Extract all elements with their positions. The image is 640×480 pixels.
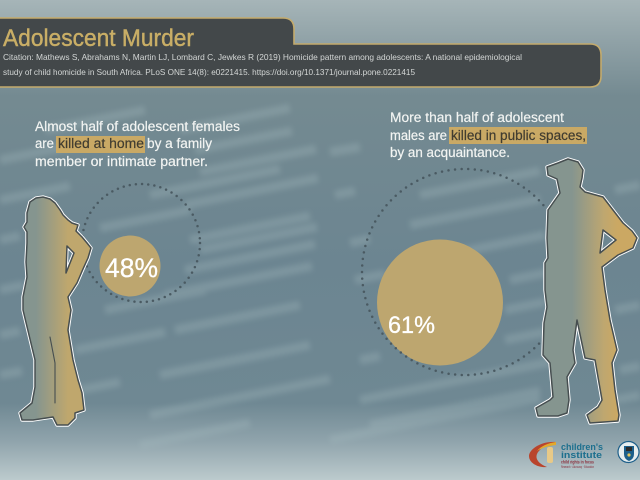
female statement text: by a family <box>147 136 212 151</box>
female statement text <box>35 119 240 169</box>
panel: female statistic <box>20 119 240 425</box>
citation: study of child homicide in South Africa. PLoS ONE 14(8): e0221415. https://doi.org/10.1371/journal.pone.0221415 <box>3 67 415 77</box>
female percentage: 48% <box>105 253 158 283</box>
female solid circle <box>100 236 160 296</box>
logo: university crest <box>618 442 639 462</box>
icon: logo arc <box>529 442 556 467</box>
male statement text: by an acquaintance. <box>390 145 510 160</box>
male dotted circle <box>362 169 568 375</box>
male percentage: 61% <box>388 312 435 339</box>
citation: Citation: Mathews S, Abrahams N, Martin LJ, Lombard C, Jewkes R (2019) Homicide pattern among adolescents: A national epidemiological <box>3 52 522 62</box>
logo: children's institute <box>529 442 603 469</box>
male highlight <box>449 127 587 144</box>
male silhouette <box>536 159 637 423</box>
logo text: Research · Advocacy · Education <box>561 465 594 469</box>
male statement text: killed in public spaces, <box>451 128 586 143</box>
citation <box>3 52 522 77</box>
header panel <box>0 18 601 87</box>
female silhouette <box>20 197 91 425</box>
female dotted circle <box>82 184 200 302</box>
logo text <box>561 442 603 469</box>
logo text: institute <box>561 450 602 460</box>
female statement text: Almost half of adolescent females <box>35 119 240 134</box>
female statement text: killed at home <box>58 136 144 151</box>
female highlight <box>56 136 145 153</box>
male statement text: males are <box>390 128 447 143</box>
panel: male statistic <box>362 110 637 423</box>
logo text: child rights in focus <box>561 460 594 464</box>
male statement text <box>390 110 586 160</box>
title: Adolescent Murder <box>3 25 194 52</box>
male statement text: More than half of adolescent <box>390 110 564 125</box>
male solid circle <box>377 240 503 366</box>
female statement text: member or intimate partner. <box>35 154 208 169</box>
female statement text: are <box>35 136 54 151</box>
logo text: children's <box>561 442 603 452</box>
